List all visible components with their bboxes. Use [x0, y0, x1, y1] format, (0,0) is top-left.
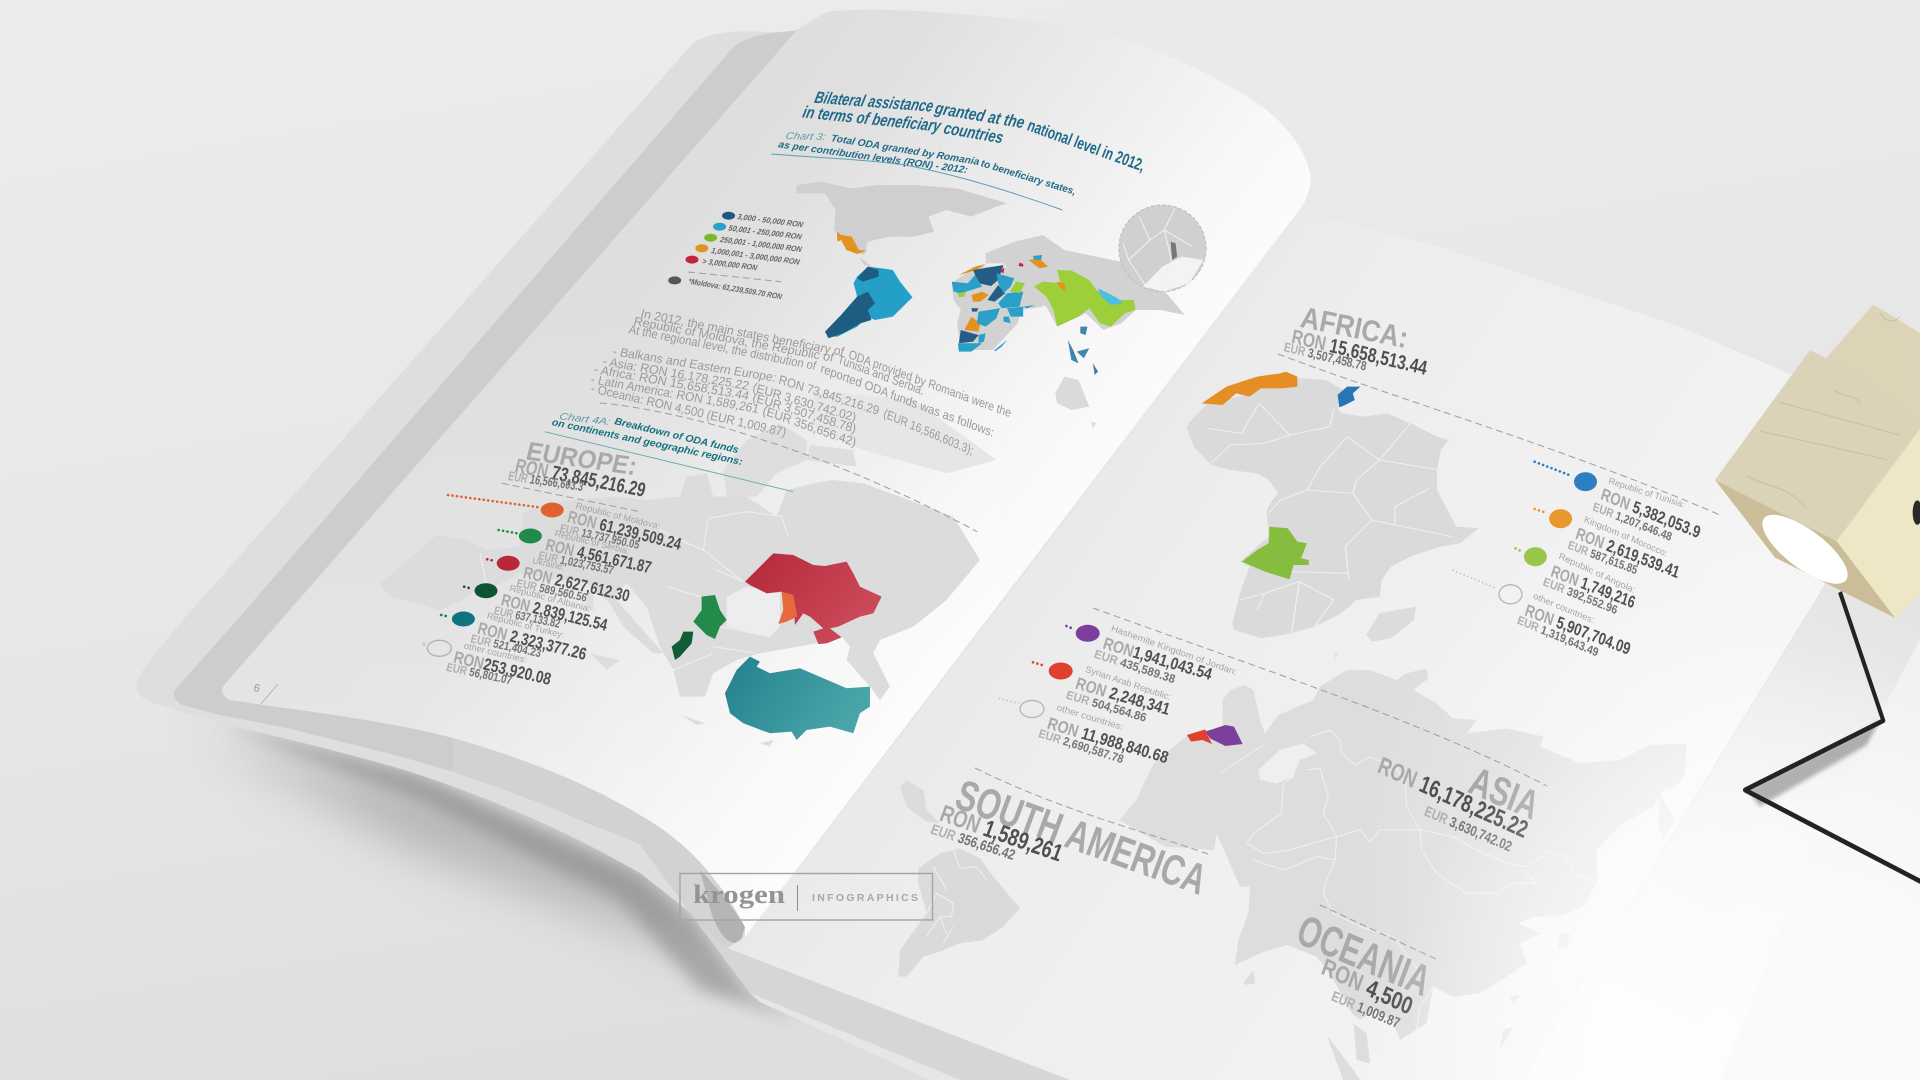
- South America totals: RON 1,589,261: [936, 800, 1066, 867]
- legend: Africa Tunisia: EUR 1,207,646.48: [1591, 500, 1674, 544]
- text block: summary paragraph: RON 73,845,216.29: [777, 373, 881, 418]
- Tunisia highlight: [1338, 387, 1360, 407]
- Oceania totals: RON 4,500: [1318, 954, 1416, 1021]
- wood block underside: [1715, 480, 1895, 618]
- Serbia highlight: [693, 595, 727, 639]
- watermark: krogen infographics: INFOGRAPHICS: [812, 892, 918, 904]
- wood block right face: [1837, 429, 1920, 618]
- Europe totals: EUROPE:: [523, 436, 640, 481]
- Africa grey base: [952, 267, 1043, 350]
- Oceania totals: EUR 1,009.87: [1329, 989, 1402, 1032]
- legend: chart 3 contribution levels: 1,000,001 - 3,000,000 RON: [710, 246, 801, 267]
- legend: Africa other countries: EUR 1,319,643.49: [1516, 613, 1601, 660]
- heading: chart 3 caption: Total ODA granted by Romania: [830, 133, 981, 168]
- lamp shadow: [1747, 721, 1880, 806]
- wood grain: [1747, 313, 1900, 508]
- legend: Africa Tunisia: [1535, 462, 1703, 544]
- Europe totals: EUR 16,566,603.3: [507, 468, 585, 494]
- heading: bilateral assistance title: [801, 88, 1147, 176]
- legend: Africa Morocco: EUR 587,615.85: [1566, 538, 1640, 577]
- legend: chart 3 contribution levels: *Moldova: 61,239,509.70 RON: [688, 277, 783, 301]
- legend: Asia Syria: EUR 504,564.86: [1064, 688, 1149, 725]
- legend: Europe Ukraine: [487, 556, 632, 606]
- inset globe: Moldova locator: [1119, 205, 1206, 292]
- panel: right page: [728, 308, 1826, 1080]
- heading: chart 3 caption: [771, 131, 1077, 210]
- page highlight from lamp: [1498, 734, 1686, 890]
- legend: Africa Angola: [1516, 547, 1638, 617]
- legend: Asia Jordan: Hashemite Kingdom of Jordan:: [1110, 623, 1238, 677]
- Mexico shape: [837, 232, 867, 254]
- map: world chart 3: [796, 182, 1206, 428]
- Albania highlight: [672, 632, 693, 660]
- legend: Africa Morocco: RON 2,619,539.41: [1574, 524, 1682, 582]
- page number: 6: [252, 682, 261, 695]
- legend: Europe Serbia: Republic of Serbia:: [554, 528, 631, 556]
- floor band beside right page: [1523, 428, 1920, 1080]
- legend: chart 3 contribution levels: 50,001 - 250,000 RON: [727, 224, 803, 241]
- legend: Asia other countries: other countries:: [1055, 702, 1125, 732]
- legend: Asia Syria: RON 2,248,341: [1073, 674, 1173, 719]
- text block: summary paragraph: At the regional level, the distribution of: [627, 322, 818, 373]
- floor light from lamp: [1300, 640, 1920, 1080]
- legend: Europe Moldova: Republic of Moldova:: [575, 501, 661, 531]
- text block: summary paragraph: (EUR 356,656.42): [761, 403, 858, 450]
- legend: Europe Turkey: Republic of Turkey:: [486, 611, 566, 640]
- legend: Africa Morocco: [1535, 509, 1682, 582]
- panel: left page: [200, 10, 1311, 960]
- legend: Asia other countries: RON 11,988,840.68: [1045, 714, 1171, 767]
- heading: chart 4A caption: Breakdown of ODA funds: [613, 416, 740, 456]
- Africa coloured countries: [952, 264, 1036, 352]
- legend: chart 3 contribution levels: 250,001 - 1,000,000 RON: [718, 235, 803, 254]
- heading: chart 4A caption: [545, 412, 793, 492]
- legend: Asia Jordan: [1066, 623, 1238, 686]
- heading: bilateral assistance title: countries: [942, 119, 1005, 147]
- legend: Europe Albania: [464, 583, 610, 635]
- map: South America background: [898, 780, 1020, 977]
- legend: Europe Turkey: RON 2,323,377.26: [476, 619, 588, 664]
- Europe totals: RON 73,845,216.29: [513, 455, 648, 502]
- Europe totals: [507, 436, 648, 502]
- legend: Africa other countries: other countries:: [1532, 591, 1596, 625]
- Asia totals: RON 16,178,225.22: [1374, 752, 1531, 844]
- text block: summary paragraph: (EUR 3,507,458.78): [751, 390, 858, 436]
- legend: Asia Syria: Syrian Arab Republic:: [1084, 664, 1172, 702]
- legend: Europe Albania: Republic of Albania:: [509, 583, 592, 614]
- legend: Asia Jordan: EUR 435,589.38: [1092, 647, 1177, 686]
- legend: Europe Albania: EUR 637,133.82: [493, 604, 562, 631]
- Morocco highlight: [1202, 372, 1297, 405]
- legend: Asia Jordan: RON1,941,043.54: [1101, 634, 1215, 684]
- text block: summary paragraph: [589, 307, 1013, 458]
- text block: summary paragraph: In 2012, the main states beneficiary of: [639, 307, 846, 359]
- wood block front face: [1715, 350, 1920, 541]
- page number: [252, 682, 278, 704]
- legend: Europe Serbia: EUR 1,023,753.57: [537, 548, 616, 577]
- heading: bilateral assistance title: granted at the: [932, 99, 1027, 132]
- legend: Africa Tunisia: Republic of Tunisia:: [1607, 476, 1686, 510]
- legend: Europe other countries: EUR 56,801.07: [445, 660, 514, 687]
- legend: Europe other countries: [423, 640, 553, 689]
- legend: Europe Serbia: [499, 528, 653, 577]
- legend: Asia other countries: [999, 698, 1171, 767]
- heading: chart 4A caption: Chart 4A:: [558, 412, 612, 428]
- heading: chart 3 caption: Chart 3:: [784, 131, 827, 143]
- book drop shadow: [200, 723, 800, 1020]
- legend: Europe Ukraine: Ukraine:: [531, 556, 566, 572]
- book cover and page stack: [137, 30, 1070, 1080]
- Turkey highlight: [725, 657, 870, 740]
- legend: Africa other countries: RON 5,907,704.09: [1523, 601, 1633, 659]
- legend: Europe Moldova: [448, 495, 684, 554]
- legend: Europe other countries: RON253,920.08: [452, 648, 553, 689]
- Eurasia grey base: [986, 235, 1185, 330]
- legend: Europe Albania: RON 2,839,125.54: [499, 590, 610, 635]
- legend: Africa other countries: [1452, 570, 1633, 660]
- watermark: krogen infographics: krogen: [693, 880, 786, 909]
- text block: summary paragraph: - Latin America: RON 1,589,261: [589, 372, 761, 416]
- text block: summary paragraph: ODA provided by Romania were the: [847, 347, 1013, 420]
- South America totals: EUR 356,656.42: [928, 822, 1017, 864]
- legend: Europe Ukraine: EUR 589,560.56: [515, 576, 589, 605]
- lamp bulb: [1755, 502, 1855, 597]
- map: Asia background: [1119, 668, 1687, 1080]
- text block: summary paragraph: reported ODA funds was as follows:: [819, 361, 996, 440]
- legend: Europe Serbia: RON 4,561,671.87: [544, 535, 653, 577]
- wood block rear: [1827, 304, 1920, 541]
- Africa totals: RON 15,658,513.44: [1290, 326, 1430, 380]
- South America totals: [928, 771, 1213, 904]
- legend: Asia Syria: [1033, 662, 1173, 725]
- legend: Africa Morocco: Kingdom of Morocco:: [1583, 514, 1669, 559]
- Africa totals: [1283, 301, 1430, 380]
- text block: summary paragraph: - Balkans and Eastern Europe:: [611, 344, 778, 385]
- Africa totals: AFRICA:: [1298, 301, 1411, 355]
- lamp: [1715, 304, 1920, 885]
- legend: chart 3 contribution levels: [668, 212, 804, 301]
- heading: chart 3 caption: to beneficiary states,: [980, 158, 1077, 198]
- map: Africa: [1186, 372, 1478, 658]
- lamp stand: [1745, 592, 1920, 885]
- legend: chart 3 contribution levels: > 3,000,000 RON: [701, 257, 758, 272]
- legend: Africa Tunisia: RON 5,382,053.9: [1598, 485, 1703, 542]
- legend: Europe Turkey: [441, 611, 588, 664]
- legend: Africa Angola: RON 1,749,216: [1549, 562, 1638, 612]
- dashed separators on right page: [975, 354, 1720, 960]
- legend: Europe Turkey: EUR 521,404.23: [469, 632, 543, 660]
- lamp switch: [1913, 500, 1920, 525]
- legend: Europe Moldova: RON 61,239,509.24: [566, 507, 684, 554]
- floor highlight strip: [1720, 639, 1920, 1080]
- watermark: krogen infographics: [680, 874, 932, 920]
- legend: Europe Moldova: EUR 13,737,950.05: [558, 521, 641, 552]
- text block: summary paragraph: (EUR 3,630,742.02): [751, 380, 858, 425]
- legend: Europe other countries: other countries:: [463, 641, 528, 665]
- heading: bilateral assistance title: national level in 2012,: [1026, 115, 1147, 176]
- South America shapes: [827, 267, 912, 337]
- Moldova highlight: [778, 592, 797, 624]
- Asia coloured countries: [1019, 255, 1136, 375]
- legend: Europe Ukraine: RON 2,627,612.30: [521, 563, 632, 606]
- dashed separators on left page: [502, 403, 977, 532]
- legend: Asia other countries: EUR 2,690,587.78: [1037, 726, 1126, 766]
- legend: Africa Angola: Republic of Angola:: [1558, 551, 1637, 595]
- heading: bilateral assistance title: in terms of beneficiary: [801, 103, 944, 136]
- South America totals: SOUTH AMERICA: [949, 771, 1213, 904]
- Ukraine highlight: [745, 553, 882, 644]
- text block: summary paragraph: Republic of Moldova, the Republic of: [632, 314, 836, 365]
- Asia totals: ASIA: [1463, 759, 1545, 828]
- text block: summary paragraph: (EUR 16,566,603.3);: [882, 406, 975, 458]
- Asia totals: EUR 3,630,742.02: [1422, 804, 1514, 855]
- text block: summary paragraph: - Oceania: RON 4,500 (EUR 1,009.87): [589, 381, 788, 440]
- Oceania totals: OCEANIA: [1291, 906, 1437, 1006]
- Angola highlight: [1242, 527, 1309, 579]
- text block: summary paragraph: - Africa: RON 15,658,513.44: [592, 362, 751, 403]
- heading: bilateral assistance title: Bilateral assistance: [813, 88, 936, 116]
- legend: chart 3 contribution levels: 3,000 - 50,000 RON: [736, 212, 804, 229]
- Africa totals: EUR 3,507,458.78: [1283, 339, 1368, 374]
- text block: summary paragraph: - Asia: RON 16,178,225.22: [601, 354, 751, 393]
- Syria and Jordan highlights: [1187, 725, 1243, 746]
- heading: chart 3 caption: as per contribution levels (RON) - 2012:: [777, 140, 969, 176]
- heading: chart 4A caption: on continents and geographic regions:: [551, 417, 744, 468]
- text block: summary paragraph: Tunisia and Serbia.: [836, 352, 926, 398]
- map: Europe background: [480, 396, 996, 746]
- legend: Africa Angola: EUR 392,552.96: [1541, 575, 1620, 617]
